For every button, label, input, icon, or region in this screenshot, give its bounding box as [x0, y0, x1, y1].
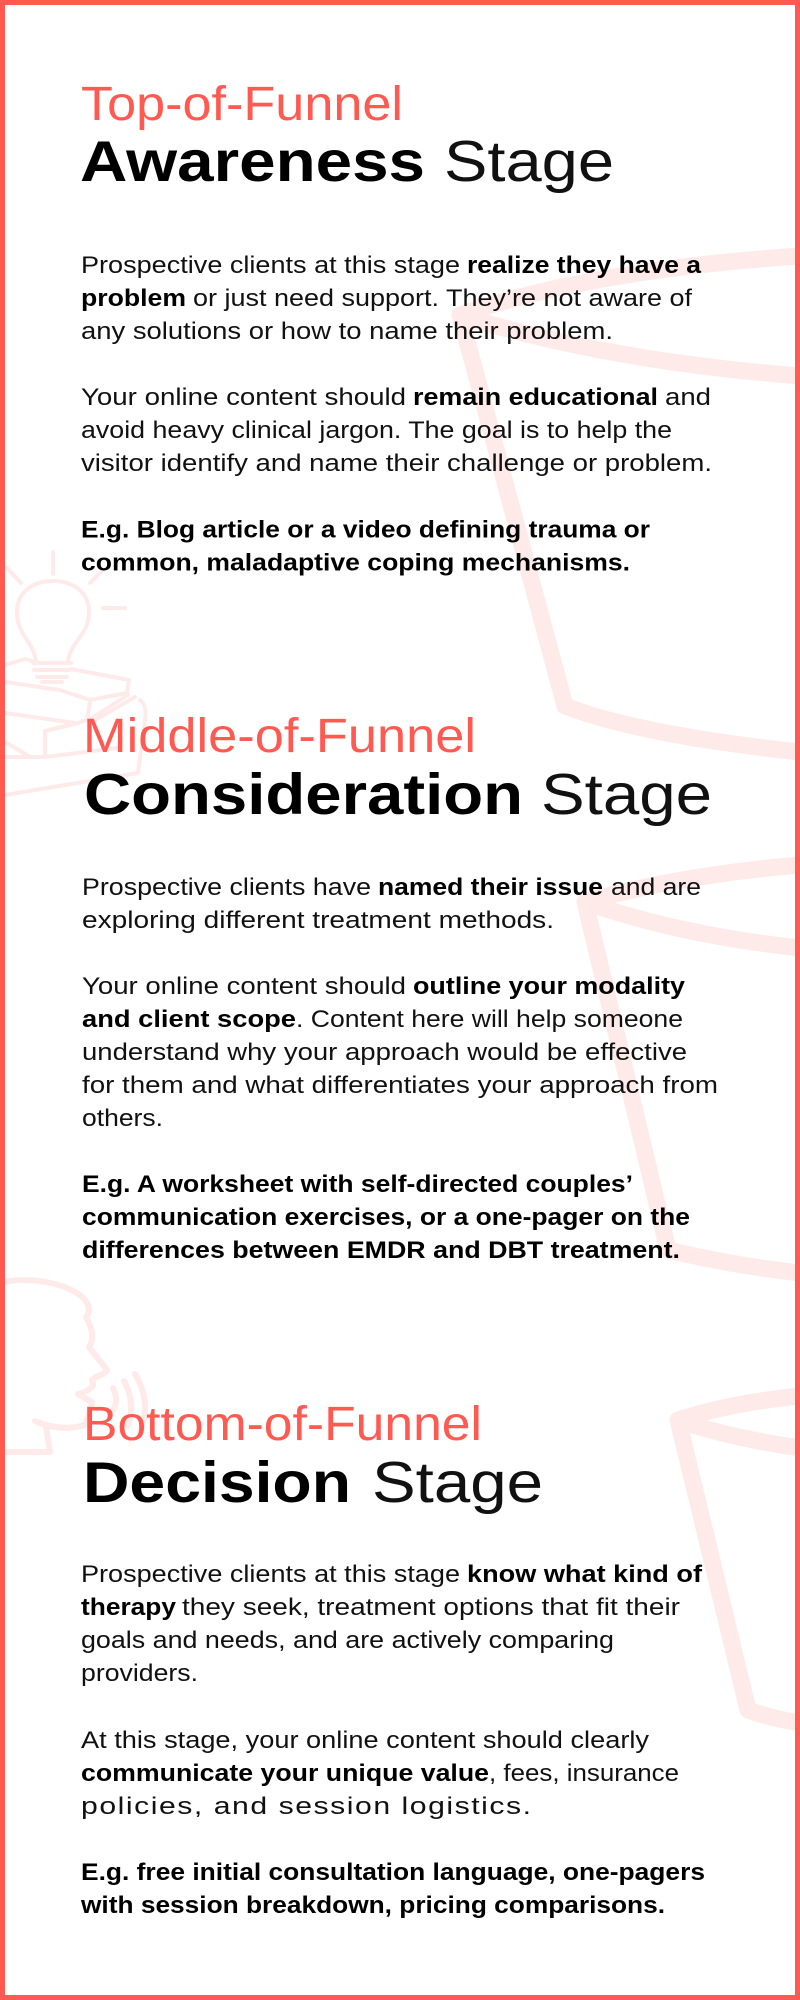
text block: decision paragraph 2: communicate your unique value	[81, 1761, 489, 1787]
text block: awareness paragraph 1	[81, 253, 702, 345]
text block: awareness paragraph 1: or just need support. They’re not aware of	[193, 286, 692, 312]
heading: top-of-funnel: Top-of-Funnel	[81, 77, 403, 131]
text block: decision paragraph 2: At this stage, your online content should clearly	[81, 1728, 649, 1754]
text block: decision example: with session breakdown, pricing comparisons.	[80, 1893, 665, 1919]
text block: awareness paragraph 1: realize they have a	[467, 253, 702, 279]
text block: consideration paragraph 2: . Content here will help someone	[296, 1007, 683, 1033]
text block: consideration paragraph 1: Prospective clients have	[82, 875, 371, 901]
text block: decision example	[80, 1860, 705, 1919]
icon: funnel bottom	[678, 1396, 800, 1723]
text block: decision paragraph 1: Prospective clients at this stage	[81, 1562, 460, 1588]
text block: awareness example: common, maladaptive coping mechanisms.	[81, 550, 630, 576]
text block: decision example: E.g. free initial consultation language, one-pagers	[81, 1860, 705, 1886]
text block: consideration paragraph 2: outline your modality	[413, 974, 685, 1000]
text block: consideration example: differences between EMDR and DBT treatment.	[82, 1238, 680, 1264]
text block: awareness paragraph 2: remain educational	[413, 385, 658, 411]
text block: consideration paragraph 1: and are	[611, 875, 701, 901]
icon: funnel top	[460, 256, 800, 752]
icon: speaking head	[5, 1280, 145, 1452]
heading: bottom-of-funnel: Bottom-of-Funnel	[83, 1397, 482, 1451]
text block: consideration paragraph 2: and client scope	[82, 1007, 296, 1033]
heading: middle-of-funnel: Consideration	[84, 763, 523, 827]
text block: awareness paragraph 2: visitor identify and name their challenge or problem.	[81, 451, 712, 477]
text block: awareness paragraph 1: any solutions or how to name their problem.	[81, 319, 613, 345]
text block: decision paragraph 1: providers.	[81, 1661, 198, 1687]
heading: bottom-of-funnel: Stage	[372, 1451, 543, 1515]
text block: consideration paragraph 2	[82, 974, 718, 1132]
heading: top-of-funnel: Stage	[444, 130, 614, 194]
heading: top-of-funnel	[80, 77, 614, 194]
heading: middle-of-funnel	[83, 709, 712, 827]
text block: consideration paragraph 2: others.	[82, 1106, 163, 1132]
text block: awareness paragraph 1: Prospective clients at this stage	[81, 253, 460, 279]
text block: consideration paragraph 1: named their issue	[378, 875, 603, 901]
text block: consideration example: communication exercises, or a one-pager on the	[82, 1205, 690, 1231]
text block: consideration paragraph 2: for them and what differentiates your approach from	[82, 1073, 718, 1099]
text block: consideration paragraph 1	[82, 875, 701, 934]
text block: awareness paragraph 2: Your online content should	[81, 385, 406, 411]
text block: awareness paragraph 1: problem	[81, 286, 186, 312]
text block: awareness example: E.g. Blog article or a video defining trauma or	[81, 518, 650, 544]
icon: light bulb on books	[5, 552, 145, 795]
heading: middle-of-funnel: Stage	[541, 763, 712, 827]
text block: consideration example	[82, 1172, 690, 1264]
heading: bottom-of-funnel	[83, 1397, 543, 1515]
icon: funnel middle	[585, 865, 800, 1273]
text block: decision paragraph 1: therapy	[81, 1595, 176, 1621]
text block: decision paragraph 2	[81, 1728, 679, 1819]
text block: awareness paragraph 2: and	[665, 385, 711, 411]
heading: bottom-of-funnel: Decision	[83, 1451, 351, 1515]
text block: decision paragraph 2: , fees, insurance	[489, 1761, 679, 1787]
heading: middle-of-funnel: Middle-of-Funnel	[83, 709, 476, 763]
text block: decision paragraph 1	[81, 1562, 702, 1687]
text block: decision paragraph 1: goals and needs, and are actively comparing	[81, 1628, 614, 1654]
text block: consideration paragraph 1: exploring different treatment methods.	[82, 908, 554, 934]
heading: top-of-funnel: Awareness	[80, 130, 425, 194]
text block: awareness paragraph 2	[81, 385, 712, 477]
text block: consideration paragraph 2: understand why your approach would be effective	[82, 1040, 687, 1066]
text block: awareness paragraph 2: avoid heavy clinical jargon. The goal is to help the	[81, 418, 672, 444]
text block: decision paragraph 2: policies, and session logistics.	[81, 1792, 531, 1819]
text block: consideration paragraph 2: Your online content should	[82, 974, 406, 1000]
text block: consideration example: E.g. A worksheet with self-directed couples’	[82, 1172, 633, 1198]
text block: decision paragraph 1: they seek, treatment options that fit their	[182, 1595, 680, 1621]
text block: awareness example	[81, 518, 650, 576]
text block: decision paragraph 1: know what kind of	[467, 1562, 702, 1588]
